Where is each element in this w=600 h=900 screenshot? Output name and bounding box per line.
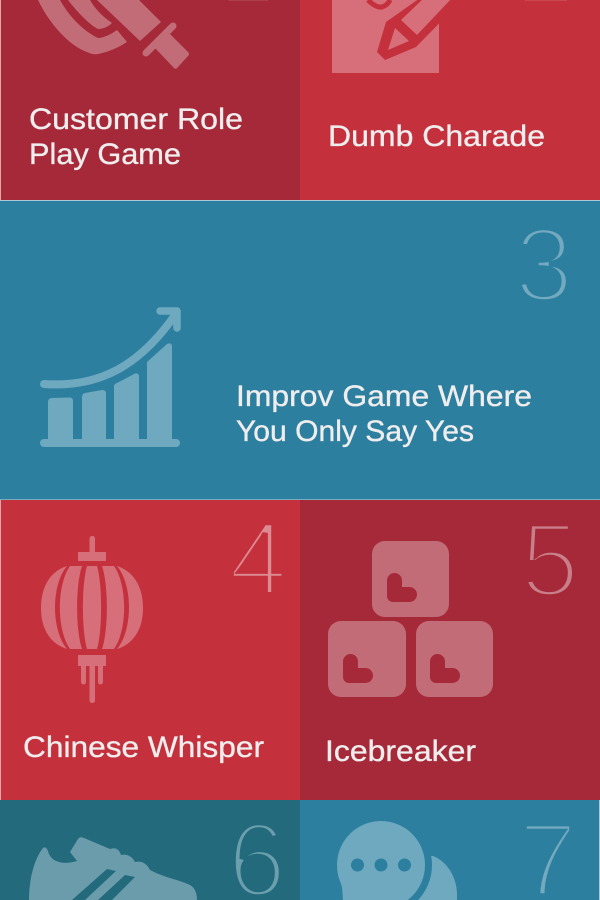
icon: heart blocks — [328, 541, 493, 697]
panel: icebreaker — [300, 500, 600, 800]
icon: shield and sword — [38, 0, 189, 69]
panel: customer role play game — [0, 0, 300, 200]
icon: rising bar chart — [40, 311, 180, 447]
label: Improv Game Where You Only Say Yes: Improv Game Where — [236, 380, 532, 413]
panel: dumb charade — [300, 0, 600, 200]
panel: improv game — [0, 200, 600, 500]
icon: chat bubbles — [330, 814, 470, 900]
icon: sneaker — [29, 837, 197, 900]
number 5: 5 — [521, 502, 579, 619]
panel: chinese whisper — [0, 500, 300, 800]
icon: lantern — [41, 536, 143, 703]
label: Customer Role Play Game: Customer Role — [29, 103, 243, 136]
label: Dumb Charade: Dumb Charade — [328, 120, 545, 153]
label: Improv Game Where You Only Say Yes: You Only Say Yes — [236, 415, 474, 448]
label: Customer Role Play Game: Play Game — [29, 138, 181, 171]
panel: item 6 — [0, 800, 300, 900]
panel: item 7 — [300, 800, 600, 900]
label: Chinese Whisper: Chinese Whisper — [23, 731, 264, 764]
number 4: 4 — [229, 501, 287, 618]
icon: pencil on notepad — [332, 0, 464, 73]
label: Icebreaker: Icebreaker — [325, 735, 476, 768]
number 3: 3 — [515, 207, 573, 324]
